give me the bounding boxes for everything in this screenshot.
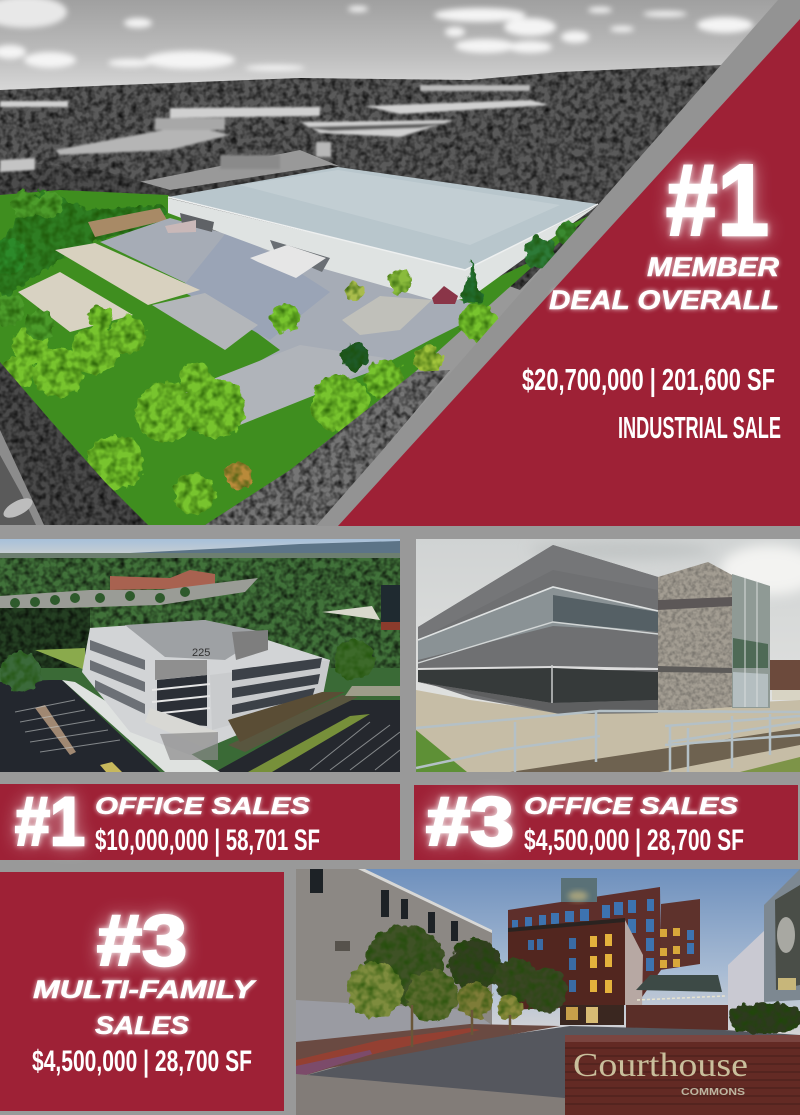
heading: OFFICE SALES <box>524 793 738 820</box>
banner: #1 office sales <box>0 783 400 860</box>
brick building rear <box>508 887 661 1000</box>
photo: glass and stone office building <box>416 539 800 772</box>
big rank #1: #1 <box>666 145 769 257</box>
parking lines <box>15 700 400 770</box>
grayscale foreground trees <box>0 362 148 525</box>
photo: 225 office building aerial <box>0 539 400 772</box>
railings <box>416 711 800 772</box>
heading: sales: SALES <box>95 1012 189 1040</box>
pavement <box>416 690 800 772</box>
glass tower <box>732 574 770 708</box>
heading: member: MEMBER <box>647 252 780 282</box>
brick sign <box>565 1035 800 1115</box>
trees <box>347 925 800 1034</box>
green landscaped site <box>0 190 590 525</box>
panel: #1 member deal overall <box>316 0 800 526</box>
panel: #3 multi-family sales <box>0 872 284 1111</box>
warehouse roof and wall <box>168 198 598 302</box>
left building <box>296 869 492 1042</box>
sidewalk <box>296 1074 565 1115</box>
brick office campus <box>110 570 215 590</box>
rank #1: #1 <box>15 783 85 860</box>
heading: deal overall: DEAL OVERALL <box>549 285 779 315</box>
rank #3: #3 <box>426 783 514 860</box>
sign text: Commons: COMMONS <box>681 1086 745 1098</box>
asphalt <box>0 680 160 772</box>
price and size: $10,000,000 | 58,701 SF <box>95 824 320 857</box>
banner: #3 office sales <box>414 783 798 860</box>
pine tree <box>1 652 41 692</box>
green trees <box>0 191 497 515</box>
green hedge <box>35 648 85 670</box>
parking and pavement <box>100 218 472 380</box>
parking lot far <box>0 578 258 610</box>
courtyard beyond <box>626 1005 728 1030</box>
photo: Courthouse Commons <box>296 869 800 1115</box>
rank #3: #3 <box>97 902 187 981</box>
photo: industrial warehouse aerial <box>0 0 800 525</box>
mulch bed <box>88 208 167 237</box>
brick building front <box>508 920 625 1010</box>
sign text: Courthouse: Courthouse <box>573 1047 748 1084</box>
heading: OFFICE SALES <box>95 793 310 820</box>
grey building <box>418 545 658 714</box>
building <box>82 620 330 755</box>
heading: multi-family: MULTI-FAMILY <box>33 976 257 1004</box>
stone tower <box>658 562 732 712</box>
road <box>308 1026 800 1098</box>
price and size: $4,500,000 | 28,700 SF <box>32 1045 252 1078</box>
distant industrial buildings <box>0 85 550 172</box>
rear brick wing <box>660 899 700 970</box>
concrete pads <box>55 243 200 305</box>
right white building and mural <box>728 931 765 1006</box>
225 numeral on building: 225 <box>192 647 210 659</box>
